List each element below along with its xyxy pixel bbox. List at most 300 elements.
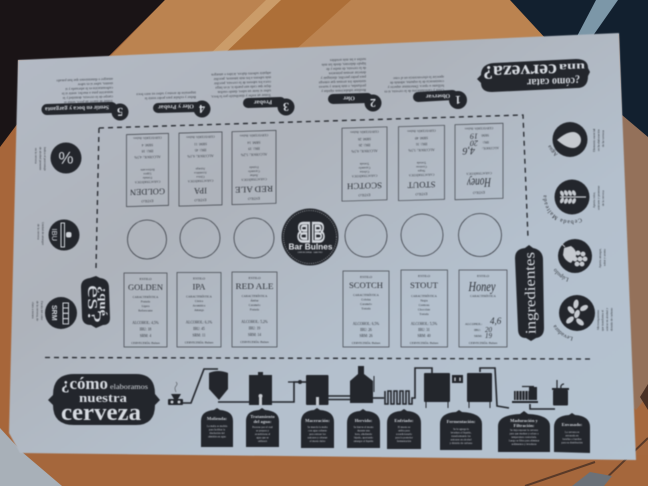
bottom card: scotch: CERVECERÍA: Bulnes bbox=[352, 340, 381, 345]
top card: scotch: ESTILO bbox=[358, 193, 371, 197]
top card: scotch: SRM: 26 bbox=[358, 137, 371, 141]
bottom card: honey handwritten bbox=[459, 270, 507, 347]
step 1: observar bbox=[413, 90, 467, 109]
panel: molienda: Molienda: bbox=[207, 416, 228, 421]
step 1: observar: Observar bbox=[426, 92, 450, 99]
top card: stout bbox=[398, 125, 444, 201]
top card: scotch: CARACTERÍSTICA bbox=[351, 174, 377, 179]
panel: enfriado: para la posterior bbox=[395, 436, 413, 440]
panel: maduracion y filtracion bbox=[498, 411, 550, 452]
dark background top left bbox=[0, 0, 165, 147]
panel: maduracion y filtracion: Filtración: bbox=[514, 423, 535, 428]
top card: red ale: SRM: 14 bbox=[247, 140, 261, 145]
title: como elaboramos nuestra cerveza: ¿cómo bbox=[61, 374, 108, 393]
bottom card: red ale: CERVECERÍA: Bulnes bbox=[240, 339, 270, 344]
bottom card: honey handwritten: IBU: bbox=[474, 328, 481, 332]
top card: red ale: IBU: 19 bbox=[248, 146, 260, 151]
icon: cebada malteada bbox=[542, 178, 590, 225]
text: agua: de la cerveza bbox=[601, 130, 605, 147]
text: cebada: Aporta color, bbox=[592, 192, 597, 208]
bottom card: stout: SRM: 40 bbox=[417, 334, 431, 338]
bottom card: golden bbox=[124, 273, 167, 347]
step 4 text bbox=[136, 91, 196, 101]
panel: maduracion y filtracion: Maduración y bbox=[510, 418, 539, 423]
top card: ipa: IPA bbox=[193, 186, 207, 196]
top card: golden: ESTILO bbox=[141, 199, 154, 203]
text: agua: en la elaboración bbox=[596, 129, 600, 151]
label: que es: ¿qué bbox=[97, 286, 109, 316]
bottom card: scotch: Cobriza bbox=[361, 298, 371, 302]
panel: tratamiento del agua: acondiciona el bbox=[255, 433, 271, 436]
text: levadura bbox=[596, 307, 614, 331]
panel: maduracion y filtracion: para que madure y aclare a bbox=[510, 432, 539, 436]
bottom card: stout: Negra bbox=[420, 298, 428, 302]
bottom card: scotch: ESTILO bbox=[360, 275, 372, 279]
bottom card: scotch: Caramelo bbox=[360, 302, 372, 306]
step 5 text: amargor o dimensiones que han pasado bbox=[56, 77, 113, 83]
panel: enfriado: El mosto se bbox=[398, 426, 411, 429]
step 3 text: Tomar un sorbo y distribuirlo por la boca, bbox=[211, 92, 271, 99]
panel: molienda: almidón en agua bbox=[208, 436, 227, 438]
bottom card: honey handwritten: CERVECERÍA: Bulnes bbox=[469, 340, 498, 345]
bottom card: scotch: CARACTERÍSTICA bbox=[353, 292, 380, 297]
top card: honey handwritten: IBU: bbox=[482, 140, 489, 144]
panel: envasado: para su distribución bbox=[561, 442, 583, 444]
icon: porcentaje alcohol: % bbox=[58, 148, 74, 167]
panel: molienda bbox=[201, 408, 233, 447]
top card: honey handwritten: CARACTERÍSTICA bbox=[465, 171, 492, 177]
bottom card: golden: ESTILO bbox=[139, 277, 152, 281]
top card: red ale: ESTILO bbox=[248, 196, 260, 201]
bottom card: scotch: SCOTCH bbox=[349, 280, 383, 290]
panel: maceracion: con agua caliente bbox=[308, 430, 328, 432]
panel: molienda: para facilitar la bbox=[209, 428, 226, 432]
bottom card: stout: CARACTERÍSTICA bbox=[411, 293, 438, 298]
icon: lupulo bbox=[554, 238, 593, 282]
bottom card: ipa: Cítrica bbox=[195, 299, 204, 303]
top card: scotch: Tostada bbox=[359, 162, 369, 166]
top card: scotch: Cobriza bbox=[359, 170, 369, 174]
panel: fermentacion: transformando los bbox=[451, 435, 471, 438]
machine: envasado bbox=[552, 380, 569, 406]
text: alcohol: en la cerveza bbox=[34, 148, 38, 164]
bottom card: ipa: SRM: 11 bbox=[193, 334, 206, 338]
text: agua bbox=[592, 129, 605, 152]
step 3: probar bbox=[243, 97, 294, 116]
top card: ipa: Amarga bbox=[195, 167, 205, 171]
step 2 text: sutiles a las más notables bbox=[329, 57, 366, 62]
label: ingredientes bbox=[515, 245, 544, 341]
bottom card: stout: Cremosa bbox=[419, 303, 430, 307]
step 5 text: Tomar de nuevo un poco, sentir el bbox=[64, 98, 113, 104]
top card: stout: CERVECERÍA: Bulnes bbox=[406, 129, 436, 134]
logo: Bar Bulnes: Bar Bulnes bbox=[288, 242, 333, 252]
top card: stout: ESTILO bbox=[415, 192, 428, 196]
bottom card: honey handwritten: 20 bbox=[485, 326, 492, 334]
tank: hervido bbox=[350, 366, 374, 403]
icon: SRM: SRM bbox=[50, 305, 57, 321]
step 5 text: cuerpo de la cerveza, densidad y la bbox=[62, 94, 113, 100]
step 2: oler: Oler bbox=[343, 94, 355, 101]
bottom card: ipa: ALCOHOL: 6,1% bbox=[186, 320, 212, 326]
panel: envasado: La cerveza es bbox=[565, 431, 579, 434]
panel: fermentacion bbox=[440, 410, 482, 450]
icon: levadura bbox=[553, 294, 596, 342]
bottom card: red ale: ESTILO bbox=[248, 276, 261, 280]
bottom card: ipa: ESTILO bbox=[193, 276, 205, 280]
step 4: oler y probar: 4 bbox=[199, 102, 205, 116]
top card: golden: Frutada bbox=[142, 176, 152, 180]
step 3 text: saber si tiene un sabor, dando vueltas bbox=[217, 88, 271, 94]
panel: maceracion: el mosto dulce bbox=[310, 440, 326, 443]
panel: hervido: durante una bbox=[357, 430, 371, 432]
step 5 text: sensación pasa a mucho; sentir si la bbox=[62, 90, 113, 96]
bottom card: red ale: SRM: 14 bbox=[248, 333, 261, 337]
tank: tratamiento bbox=[249, 372, 272, 405]
top card: red ale: ALCOHOL: 5,2% bbox=[241, 151, 267, 157]
step 3 text: más sabores a los más intensos, percibir bbox=[213, 74, 271, 81]
text: alcohol: Indica el porcentaje bbox=[43, 147, 47, 171]
panel: hervido: hora, añadiendo bbox=[355, 433, 373, 436]
top card: red ale bbox=[232, 130, 276, 205]
panel: molienda: disolución del bbox=[209, 432, 225, 435]
bottom card: scotch: SRM: 26 bbox=[359, 334, 373, 338]
step 3: probar: Probar bbox=[254, 98, 272, 105]
text: cebada bbox=[592, 185, 605, 210]
top card: ipa: ESTILO bbox=[194, 198, 207, 202]
top card: golden: CARACTERÍSTICA bbox=[134, 180, 160, 185]
bottom card: honey handwritten: 19 bbox=[485, 332, 492, 340]
text: alcohol: de alcohol presente bbox=[38, 147, 42, 171]
top card: honey handwritten: 19 bbox=[470, 132, 478, 141]
step 2 text: de la cerveza, de malta y de bbox=[326, 65, 366, 71]
text: lupulo: Aporta amargor, bbox=[598, 248, 603, 268]
icon: molino bbox=[168, 382, 183, 405]
text: cebada: de la cerveza bbox=[601, 190, 605, 206]
bottom card: stout: ALCOHOL: 5,5% bbox=[411, 322, 437, 327]
text: srm: clara a oscura bbox=[31, 302, 35, 319]
bottom card: scotch: Tostada bbox=[361, 306, 371, 310]
top card: honey handwritten: CERVECERÍA: Bulnes bbox=[464, 126, 493, 132]
wood top plank bbox=[105, 0, 547, 62]
top card: golden: CERVECERÍA: Bulnes bbox=[132, 136, 162, 141]
top card: ipa: Cítrica bbox=[196, 175, 205, 179]
top card: red ale: Ámbar bbox=[250, 173, 258, 179]
bottom card: scotch: ALCOHOL: 6,5% bbox=[353, 322, 379, 327]
panel: fermentacion: Fermentación: bbox=[447, 419, 476, 424]
top card: honey handwritten: Honey bbox=[467, 175, 492, 191]
top card: honey handwritten: 20 bbox=[470, 139, 478, 148]
step 2: oler: 2 bbox=[370, 96, 376, 110]
icon: SRM bbox=[45, 297, 77, 329]
logo: Bar Bulnes: CERVECERÍA · GASTRO bbox=[297, 251, 323, 254]
top card: golden: GOLDEN bbox=[130, 186, 165, 198]
bottom card: stout bbox=[401, 270, 448, 347]
panel: maduracion y filtracion: temperatura controlada. bbox=[511, 436, 537, 439]
plastic bottom right bbox=[572, 472, 612, 486]
text: ibu: Unidad de amargor bbox=[41, 222, 45, 245]
top card: honey handwritten: SRM: bbox=[481, 133, 489, 137]
top card: scotch: SCOTCH bbox=[347, 180, 382, 192]
panel: maceracion: Maceración: bbox=[305, 418, 330, 423]
text: lupulo: sabor y aroma bbox=[602, 248, 606, 266]
panel: tratamiento del agua: Tratamiento bbox=[250, 414, 275, 419]
top card: ipa: CARACTERÍSTICA bbox=[187, 179, 213, 184]
plastic wrap bottom left bbox=[0, 428, 62, 486]
bottom card: red ale: RED ALE bbox=[236, 281, 274, 291]
panel: enfriado: acondicionarlo bbox=[396, 433, 413, 436]
top card: red ale: RED ALE bbox=[235, 184, 273, 195]
dashed frame bbox=[45, 115, 591, 359]
title: como elaboramos nuestra cerveza bbox=[48, 374, 160, 426]
top card: honey handwritten: ALCOHOL: bbox=[482, 146, 499, 150]
title: como elaboramos nuestra cerveza: elaboramos bbox=[110, 382, 148, 391]
bottom card: golden: Refrescante bbox=[138, 308, 153, 312]
panel: envasado: envasada en bbox=[565, 434, 579, 438]
top card: golden bbox=[126, 133, 168, 207]
step 5: sentir en boca y garganta bbox=[42, 102, 129, 120]
panel: hervido: amargor al líquido bbox=[354, 440, 374, 443]
step 1 text: brillante u opaca. Determinar aspecto y bbox=[387, 84, 444, 89]
bottom card: red ale: ALCOHOL: 5,2% bbox=[241, 320, 268, 325]
panel: fermentacion: Se le agrega la bbox=[453, 428, 470, 431]
top card: stout: Tostada bbox=[416, 161, 426, 165]
panel: fermentacion: levadura al líquido, bbox=[451, 432, 472, 434]
panel: maduracion y filtracion: sedimentos y levaduras bbox=[511, 443, 537, 446]
text: srm: Escala del color bbox=[40, 301, 44, 320]
panel: enfriado: fermentación bbox=[397, 440, 412, 443]
step 2: oler bbox=[328, 93, 382, 112]
step 4: oler y probar: Oler y Probar bbox=[158, 102, 194, 110]
label: que es: es? bbox=[83, 285, 104, 323]
top card: stout: SRM: 40 bbox=[415, 136, 428, 140]
step 2 text: lúpulo dulzones, desde las más bbox=[321, 61, 366, 67]
bottom card: ipa: IBU: 45 bbox=[193, 327, 205, 331]
text: alcohol bbox=[34, 147, 47, 171]
step 1 text: consistencia de la espuma, además de bbox=[390, 78, 444, 85]
panel: hervido bbox=[347, 409, 380, 448]
icon: cebada malteada: Cebada Malteada bbox=[542, 194, 582, 225]
panel: hervido: lúpulo, aportando bbox=[354, 436, 374, 440]
step 3 text: cerca los sabores de la cerveza, percibir bbox=[213, 79, 271, 86]
icon: IBU bbox=[48, 220, 80, 250]
title: como catar una cerveza bbox=[477, 58, 590, 92]
top card: golden: ALCOHOL: 4,5% bbox=[134, 154, 161, 159]
bottom card: honey handwritten: Honey bbox=[468, 280, 496, 295]
top card: honey handwritten: ESTILO bbox=[473, 190, 485, 195]
bottom card: stout: Chocolate bbox=[418, 308, 431, 312]
logo: Bar Bulnes: B bbox=[297, 217, 310, 247]
step 4: oler y probar bbox=[153, 100, 210, 118]
panel: envasado bbox=[554, 413, 590, 453]
top card: stout: CARACTERÍSTICA bbox=[408, 173, 434, 178]
top card: ipa: IBU: 45 bbox=[194, 148, 206, 152]
label: que es bbox=[81, 276, 110, 328]
panel: fermentacion: y dióxido de carbono bbox=[450, 442, 473, 445]
step 3 text bbox=[211, 70, 271, 99]
bottom card: ipa: CERVECERÍA: Bulnes bbox=[185, 340, 214, 344]
logo: Bar Bulnes bbox=[282, 208, 338, 266]
glass circles bbox=[128, 214, 502, 259]
panel: maceracion: para extraer los bbox=[309, 433, 326, 436]
bottom card: honey handwritten: CARACTERÍSTICA bbox=[470, 293, 497, 298]
bottom card: ipa: Amarga bbox=[194, 308, 204, 312]
text: levadura: que transforma el bbox=[600, 310, 604, 331]
text: lupulo bbox=[598, 248, 606, 268]
bottom card: honey handwritten: ESTILO bbox=[477, 274, 489, 278]
panel: enfriado: Enfriado: bbox=[394, 418, 414, 423]
panel: enfriado bbox=[387, 409, 421, 449]
top card: stout: STOUT bbox=[407, 180, 436, 190]
top card: golden: SRM: 4 bbox=[142, 143, 153, 147]
bottom card: red ale: CARACTERÍSTICA bbox=[242, 293, 268, 298]
tank: molienda bbox=[209, 371, 228, 400]
top card: scotch: ALCOHOL: 6,5% bbox=[351, 148, 378, 153]
top card: red ale: Caramelo bbox=[248, 169, 260, 174]
top card: scotch: CERVECERÍA: Bulnes bbox=[349, 130, 379, 135]
top card: ipa: ALCOHOL: 6,1% bbox=[187, 153, 214, 158]
panel: maceracion: Se mezcla la malta bbox=[307, 426, 328, 429]
top card: stout: Cremosa bbox=[416, 165, 427, 169]
bottom card: ipa: IPA bbox=[193, 282, 206, 292]
top card: golden: Ligera bbox=[143, 172, 151, 176]
bottom card: golden: GOLDEN bbox=[128, 282, 163, 292]
step 1: observar: 1 bbox=[455, 93, 461, 107]
step 3: probar: 3 bbox=[283, 100, 289, 114]
icon: agua: Agua bbox=[548, 144, 558, 156]
top card: red ale: CERVECERÍA: Bulnes bbox=[239, 133, 268, 139]
top card: honey handwritten bbox=[455, 123, 503, 200]
step 2 text bbox=[318, 57, 366, 93]
text: srm bbox=[31, 301, 44, 322]
bottom card: stout: CERVECERÍA: Bulnes bbox=[410, 340, 439, 345]
panel: molienda: La malta es molida bbox=[207, 425, 228, 428]
tanks: fermentacion bbox=[424, 373, 492, 408]
title: como catar una cerveza: ¿cómo catar bbox=[527, 75, 580, 88]
step 5 text bbox=[56, 77, 113, 105]
top card: ipa: SRM: 11 bbox=[194, 142, 207, 146]
panel: tratamiento del agua bbox=[246, 408, 279, 447]
step 4 text: Beber y exhalar para poder sentir la bbox=[144, 95, 196, 101]
panel: tratamiento del agua: del agua: bbox=[254, 419, 272, 424]
top card: red ale: Frutada bbox=[249, 165, 259, 170]
step 2 text: para poder percibir, distinguir y bbox=[320, 74, 366, 80]
panel: tratamiento del agua: se prepara y bbox=[256, 430, 270, 432]
top card: golden: Refrescante bbox=[140, 168, 155, 172]
step 2 text: sintiendo los aromas que entrega bbox=[319, 79, 366, 85]
text: levadura: Microorganismo bbox=[596, 310, 600, 330]
bottom card: golden: Frutada bbox=[141, 300, 151, 304]
title: como elaboramos nuestra cerveza: cerveza bbox=[61, 400, 141, 426]
step 3 text: dejar que cada uno pueda ir, si es larga bbox=[215, 83, 271, 90]
bottom card: stout: IBU: 31 bbox=[418, 328, 430, 332]
panel: maduracion y filtracion: Luego se filtra para eliminar bbox=[509, 440, 539, 442]
bottom card: honey handwritten: ALCOHOL: bbox=[465, 322, 482, 326]
bottom card: scotch bbox=[343, 271, 389, 347]
text: levadura: dióxido de carbono bbox=[610, 307, 614, 331]
top card: scotch bbox=[342, 127, 387, 201]
top card: stout: IBU: 31 bbox=[415, 142, 427, 146]
machine: filtro bbox=[512, 386, 538, 403]
bottom card: ipa bbox=[177, 272, 221, 347]
title: como catar una cerveza: una bbox=[558, 60, 585, 73]
bottom card: golden: SRM: 4 bbox=[140, 334, 151, 338]
panel: maceracion: azúcares y obtener bbox=[308, 436, 328, 440]
bottom card: honey handwritten: SRM: bbox=[474, 334, 482, 338]
bottom card: red ale: Frutada bbox=[250, 308, 260, 312]
icon: agua bbox=[548, 121, 588, 158]
text: levadura: azúcar en alcohol y bbox=[605, 307, 609, 331]
top card: stout: ALCOHOL: 5,5% bbox=[408, 147, 435, 152]
panel: hervido: Hervido: bbox=[355, 418, 373, 423]
top card: golden: IBU: 18 bbox=[141, 149, 153, 153]
panel: maceracion bbox=[301, 408, 334, 448]
bottom card: golden: CERVECERÍA: Bulnes bbox=[131, 340, 161, 345]
top card: honey handwritten: 4,6 bbox=[463, 145, 475, 156]
bottom card: golden: IBU: 18 bbox=[140, 328, 152, 332]
text: srm: de la cerveza, de bbox=[34, 301, 40, 322]
step 5: sentir en boca y garganta: Sentir en boca y garganta bbox=[45, 104, 109, 111]
logo: Bar Bulnes: B bbox=[312, 217, 325, 247]
step 3 text: adquirir sabores dulces, ácidos o amargos bbox=[211, 70, 271, 77]
bottom card: golden: CARACTERÍSTICA bbox=[133, 294, 159, 299]
top card: ipa: CERVECERÍA: Bulnes bbox=[185, 135, 215, 140]
icon: porcentaje alcohol bbox=[50, 142, 82, 174]
step 2 text: profundas, o más lentas y suaves bbox=[318, 83, 366, 89]
bottom card: red ale: IBU: 19 bbox=[249, 326, 261, 330]
title: como elaboramos nuestra cerveza: nuestra bbox=[79, 390, 128, 405]
tank: maceracion bbox=[288, 375, 328, 405]
step 4 text: impresión de aroma y sabor en retro boca bbox=[136, 91, 196, 96]
step 5 text: sientes, sabor si es sabor bbox=[77, 80, 113, 86]
panel: envasado: Envasado: bbox=[562, 422, 583, 427]
dark background top right bbox=[510, 0, 648, 137]
bottom card: stout: Tostada bbox=[419, 312, 429, 316]
top card: ipa bbox=[179, 132, 222, 206]
panel: tratamiento del agua: utilizará bbox=[258, 440, 268, 443]
top card: scotch: Caramelo bbox=[358, 166, 370, 170]
text: ibu bbox=[36, 222, 45, 245]
text: agua: Elemento esencial bbox=[592, 129, 596, 152]
bottom card: ipa: CARACTERÍSTICA bbox=[186, 294, 213, 298]
step 5: sentir en boca y garganta: 5 bbox=[117, 105, 123, 119]
icon: levadura: Levadura bbox=[553, 324, 574, 342]
bottom card: red ale: Caramelo bbox=[249, 303, 261, 307]
step 2 text: Realizar inhalaciones rápidas y bbox=[321, 88, 366, 93]
step 5 text: carbonatación es la adecuada y si bbox=[65, 86, 113, 91]
panel: tratamiento del agua: Proceso por el cual bbox=[252, 426, 273, 429]
step 2 text: detectar aromas primarios bbox=[328, 70, 366, 76]
panel: hervido: Se hierve el mosto bbox=[354, 426, 374, 429]
panel: maduracion y filtracion: Se deja reposar la cerveza bbox=[510, 429, 539, 432]
top card: ipa: Aromática bbox=[194, 171, 207, 175]
step 1 text: apreciar la efervescencia en el vaso bbox=[393, 75, 444, 80]
text: cebada: azúcares y proteínas bbox=[596, 185, 600, 210]
step 1 text: Color y carbonatación de la cerveza, si es bbox=[384, 87, 444, 94]
bottom card: ipa: Aromática bbox=[193, 304, 206, 308]
bottom card: golden: ALCOHOL: 4,5% bbox=[132, 321, 159, 326]
top card: stout: Negra bbox=[417, 169, 425, 173]
panel: fermentacion: azúcares en alcohol bbox=[450, 438, 472, 442]
pipes bbox=[183, 368, 555, 409]
panel: enfriado: enfría para bbox=[398, 430, 411, 432]
bottom card: red ale bbox=[232, 272, 277, 347]
text: ibu: de la cerveza bbox=[36, 224, 40, 240]
title: como catar una cerveza: cerveza? bbox=[483, 59, 557, 82]
icon: lupulo: Lúpulo bbox=[554, 268, 569, 282]
panel: tratamiento del agua: agua que se bbox=[256, 436, 270, 440]
bottom card: stout: STOUT bbox=[410, 280, 439, 290]
